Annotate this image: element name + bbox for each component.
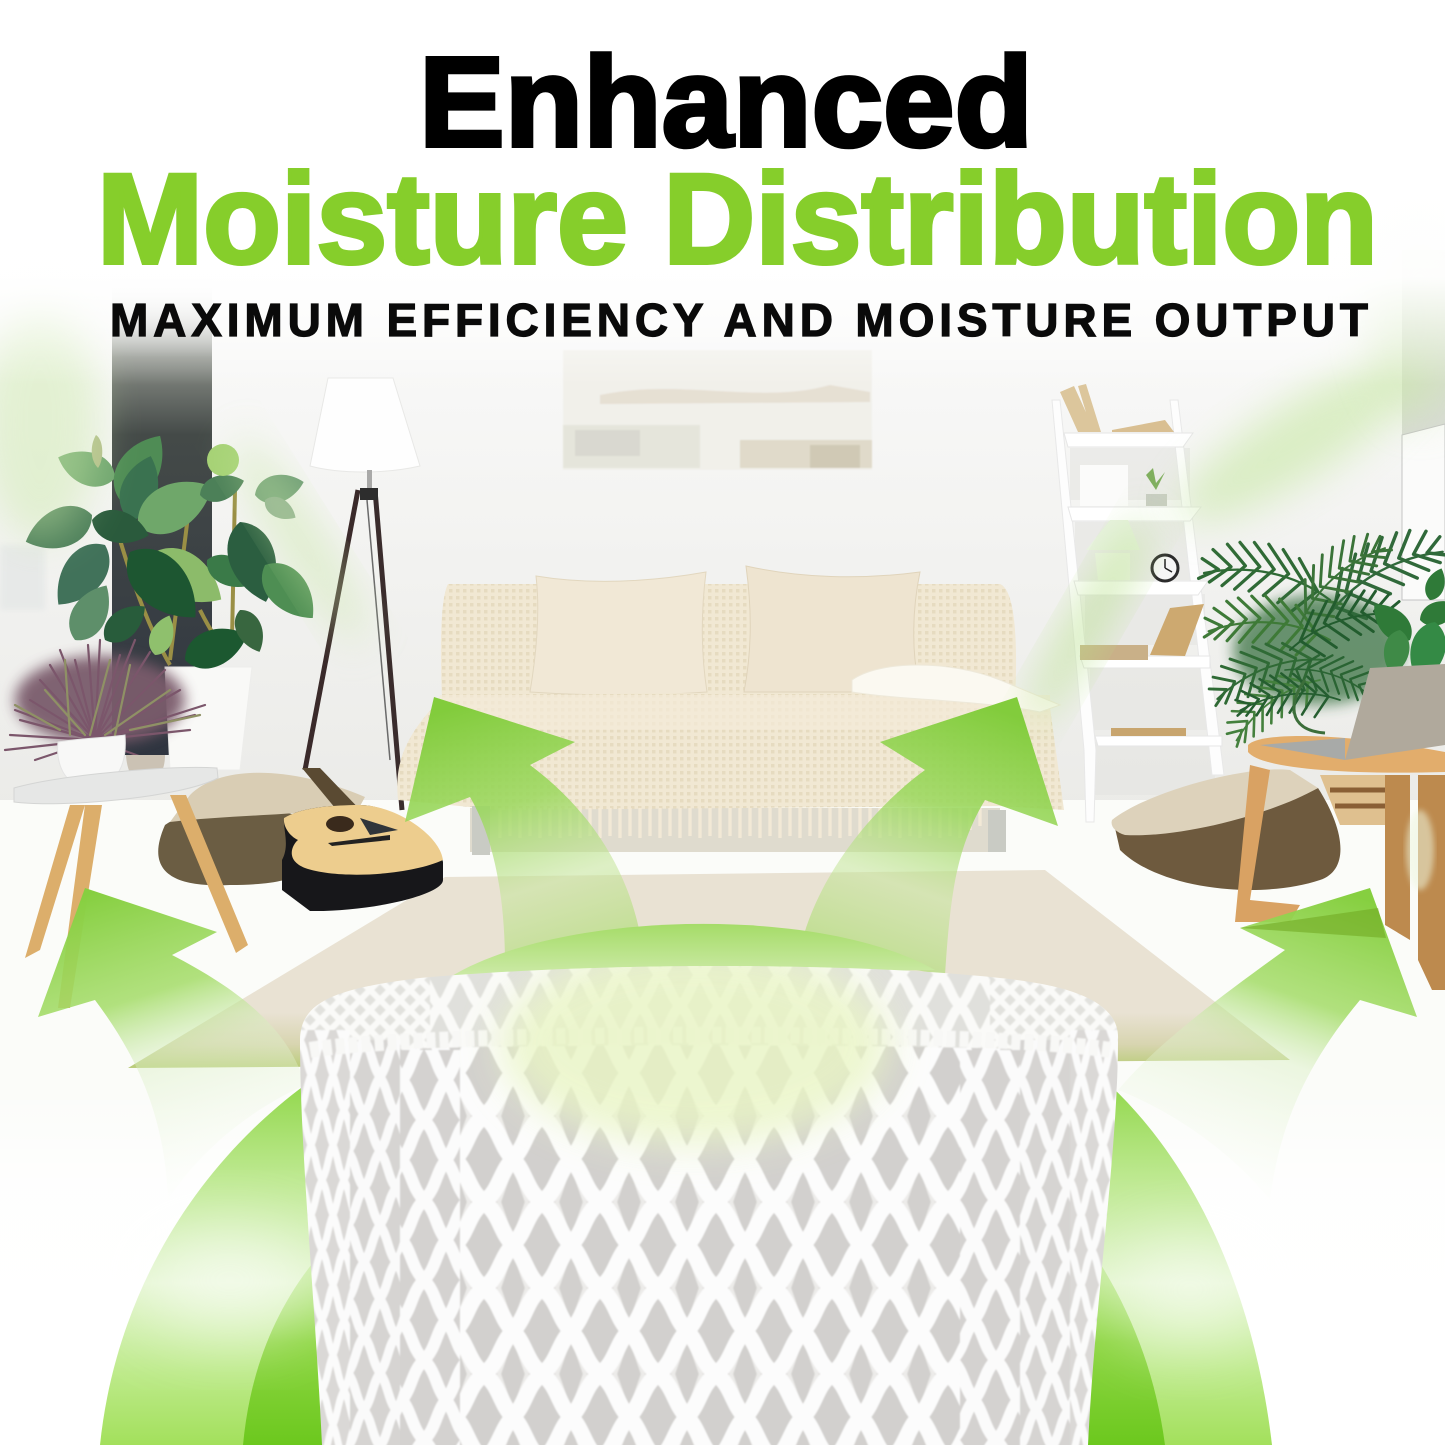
front mesh centre (415, 1046, 1012, 1445)
left cushion (530, 572, 707, 695)
books (1060, 384, 1101, 432)
sofa back (441, 584, 1016, 700)
white blanket (852, 665, 1060, 712)
title line two: Moisture Distribution (97, 148, 1378, 291)
green mist rays (0, 220, 1445, 890)
tripod legs (305, 490, 358, 770)
subtitle: MAXIMUM EFFICIENCY AND MOISTURE OUTPUT (110, 294, 1368, 346)
candles (1080, 465, 1128, 506)
small succulent (1146, 468, 1165, 490)
table top (14, 767, 218, 804)
teacup (126, 755, 165, 782)
white fade behind heading (0, 0, 1445, 385)
slatted rack (1320, 775, 1385, 825)
heading (97, 31, 1378, 346)
ladder shelf (1052, 384, 1224, 822)
rubber plant (19, 425, 327, 677)
shelves (1064, 433, 1193, 447)
right wall shelf unit (1402, 250, 1445, 435)
floor lamp (305, 378, 420, 810)
painting (563, 350, 872, 470)
white flower pot (58, 735, 125, 783)
wall (0, 0, 1445, 810)
airflow arrows (38, 697, 1417, 1200)
table legs (1235, 765, 1300, 922)
lamp shade (310, 378, 420, 472)
sofa legs (472, 806, 1006, 855)
arrow: right-centre (800, 697, 1058, 975)
fringe (500, 808, 980, 838)
clock (1152, 555, 1178, 581)
front mesh sides (400, 1050, 460, 1445)
table lamp (1086, 520, 1140, 550)
arrow: far-left (38, 888, 305, 1200)
arrow: far-right (1118, 888, 1417, 1200)
right cushion (744, 566, 920, 692)
green dome: right (1085, 1085, 1272, 1445)
table legs (25, 795, 248, 1008)
heather foliage (15, 656, 185, 744)
broad leaves (1364, 595, 1420, 650)
pouf right (1112, 769, 1340, 890)
humidifier wick filter (290, 945, 1130, 1445)
green mist inside filter (500, 945, 890, 1145)
right palm plant (1199, 519, 1445, 764)
sofa (397, 566, 1064, 855)
laptop (1345, 664, 1445, 760)
floor (0, 800, 1445, 1445)
shelf rails (1052, 400, 1096, 822)
pouf left (158, 773, 365, 885)
rug (128, 870, 1290, 1068)
table top (1248, 736, 1445, 773)
arc behind filter top (450, 924, 935, 977)
guitar (282, 768, 443, 911)
arrow head overlap: far-right (1240, 908, 1386, 938)
rubber plant pot (165, 667, 252, 770)
wooden table and laptop (1235, 664, 1445, 990)
rim highlight (310, 1035, 1110, 1050)
window shadow (0, 545, 45, 610)
succulent pot (1146, 494, 1167, 506)
arrow: left-centre (405, 697, 642, 965)
inner back wall (430, 966, 990, 1049)
under-sofa shadow (470, 808, 1000, 852)
heather plant and side table (5, 640, 248, 1008)
green dome: left (100, 1085, 330, 1445)
dark wall column (112, 270, 212, 755)
shadow under shelves (1070, 448, 1215, 795)
title line one: Enhanced (419, 31, 1033, 174)
sofa throw (397, 693, 1064, 810)
